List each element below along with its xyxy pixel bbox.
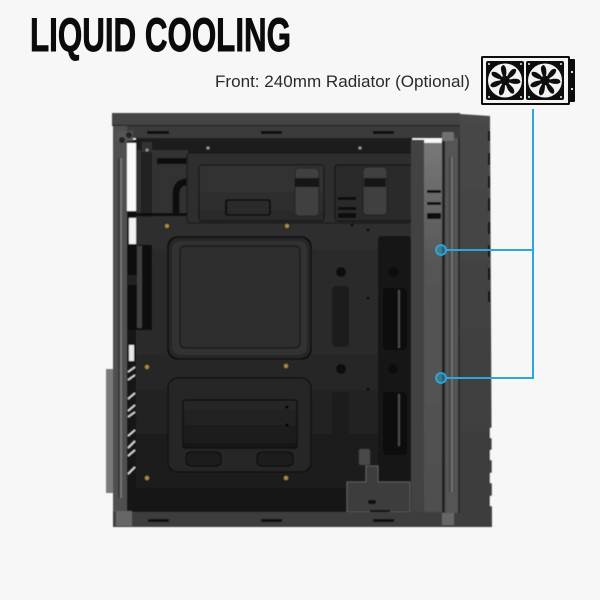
middle slots — [332, 286, 349, 453]
curved pipe — [176, 182, 187, 214]
blue callout connector — [446, 109, 533, 379]
black standoffs — [336, 224, 398, 390]
right pillar — [411, 132, 460, 513]
left rear plate — [106, 369, 114, 493]
motherboard standoffs: gold screws — [144, 224, 290, 480]
callout marker lower — [436, 373, 446, 383]
cable and bracket line — [128, 213, 190, 216]
drive cage dark zone — [378, 236, 411, 481]
icon: 240mm radiator with two fans — [481, 56, 575, 105]
rear fan — [127, 245, 152, 330]
PC case, open side view — [106, 113, 493, 527]
upper left recess — [199, 165, 324, 221]
large square stamped panel — [168, 237, 311, 359]
tall slot 1 — [295, 168, 319, 216]
case floor — [137, 493, 411, 513]
front panel lower edge scallops — [490, 428, 493, 506]
upper raised panel — [187, 153, 412, 223]
left rail — [113, 126, 127, 527]
tall slot 2 — [363, 167, 387, 215]
lower square stamped panel — [168, 378, 311, 472]
title: LIQUID COOLING — [30, 8, 291, 61]
bottom strip — [113, 511, 460, 527]
top strips — [112, 113, 460, 152]
front panel — [460, 114, 492, 527]
PSU bracket — [347, 449, 410, 513]
radiator label: Front: 240mm Radiator (Optional) — [215, 73, 470, 91]
upper right recess — [335, 165, 412, 221]
vent slots — [338, 197, 356, 218]
small port opening — [226, 200, 270, 215]
front panel edge notches — [488, 131, 490, 302]
top recess — [136, 138, 412, 153]
back panel — [136, 138, 412, 512]
white gap and slot covers — [127, 140, 137, 512]
callout marker upper — [436, 245, 446, 255]
